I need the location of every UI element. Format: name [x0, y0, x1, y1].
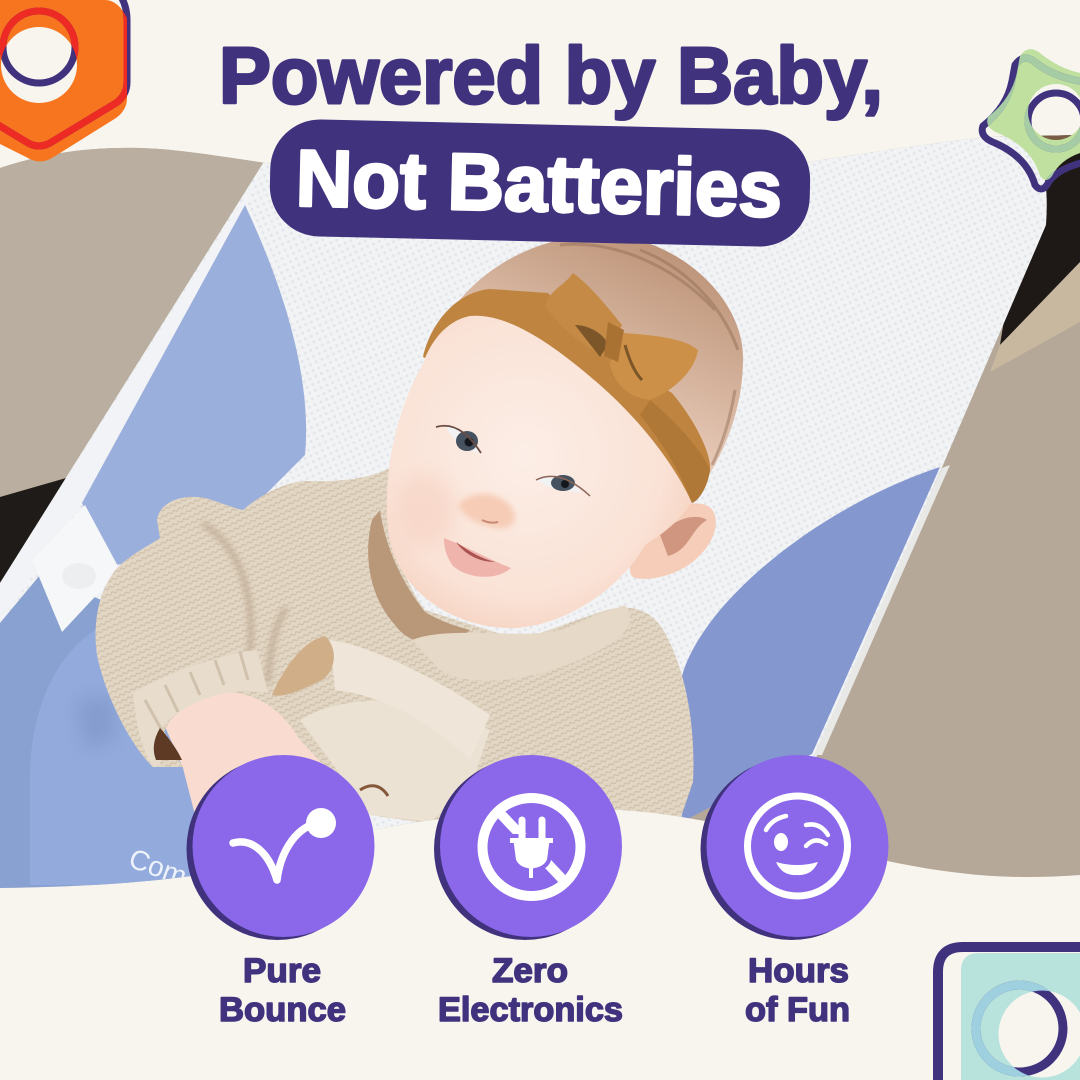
bouncer seat: mesh and frame: [0, 130, 1047, 900]
title pill: [269, 118, 811, 248]
decoration: green star top right: [982, 49, 1080, 189]
feature: hours of fun: [700, 755, 888, 1029]
decoration: teal square bottom right: [938, 947, 1080, 1080]
label: Electronics: [438, 991, 623, 1029]
sleeve inner shadow: [154, 728, 182, 760]
skin: arm and hand: [166, 692, 322, 812]
mouth: [444, 538, 511, 577]
hair strands: [560, 244, 738, 465]
nose: [458, 494, 514, 528]
chest panel and fringe: [272, 636, 490, 822]
photo: baby in bouncer: [0, 135, 1080, 888]
cheek blush: [398, 476, 454, 542]
title line 2: Not Batteries: [295, 133, 783, 233]
badge: [700, 755, 888, 940]
star outline: [982, 58, 1080, 189]
photo background: sofa and carpet: [0, 135, 1080, 888]
badge: [434, 755, 622, 940]
decoration: orange hexagon top left: [0, 0, 127, 162]
right eye: [536, 475, 590, 496]
star outline overlap: [982, 58, 1080, 189]
square outline: [938, 947, 1080, 1080]
headband: [423, 289, 710, 503]
title line 1: Powered by Baby,: [219, 31, 883, 120]
feature: pure bounce: [186, 755, 374, 1029]
sweater body and arm: [96, 468, 693, 825]
label: Zero: [492, 952, 568, 990]
label: Pure: [243, 952, 321, 990]
feature: zero electronics: [434, 755, 623, 1029]
fabric logo text: Com: [125, 843, 191, 892]
right blue fabric panel: [680, 467, 940, 822]
headband bow: [545, 273, 698, 400]
ring on hole: [976, 985, 1063, 1072]
sweater collar: [368, 510, 470, 650]
hair: [460, 242, 744, 475]
sweater fold shadows: [205, 525, 285, 680]
left blue fabric panel: [82, 205, 306, 565]
icon: winking face: [748, 796, 848, 896]
label: of Fun: [745, 991, 850, 1029]
label: Bounce: [219, 991, 346, 1029]
icon: crossed out plug: [482, 798, 580, 896]
white strap tab: [32, 505, 120, 632]
left eye: [436, 426, 481, 453]
hexagon outline overlap: [0, 0, 127, 146]
label: Hours: [748, 952, 849, 990]
pillow shadow: [80, 699, 114, 744]
lower left blue fabric: [0, 575, 200, 890]
face: [387, 314, 693, 628]
baby: [96, 235, 743, 830]
blue pillow: [30, 630, 200, 885]
hexagon outline: [0, 0, 127, 146]
icon: bouncing ball: [233, 808, 336, 880]
badge: [186, 755, 374, 940]
front collar flap: [412, 605, 630, 681]
ear: [630, 503, 716, 579]
sleeve ribbed cuff: [133, 650, 268, 767]
ring on teal: [976, 985, 1063, 1072]
